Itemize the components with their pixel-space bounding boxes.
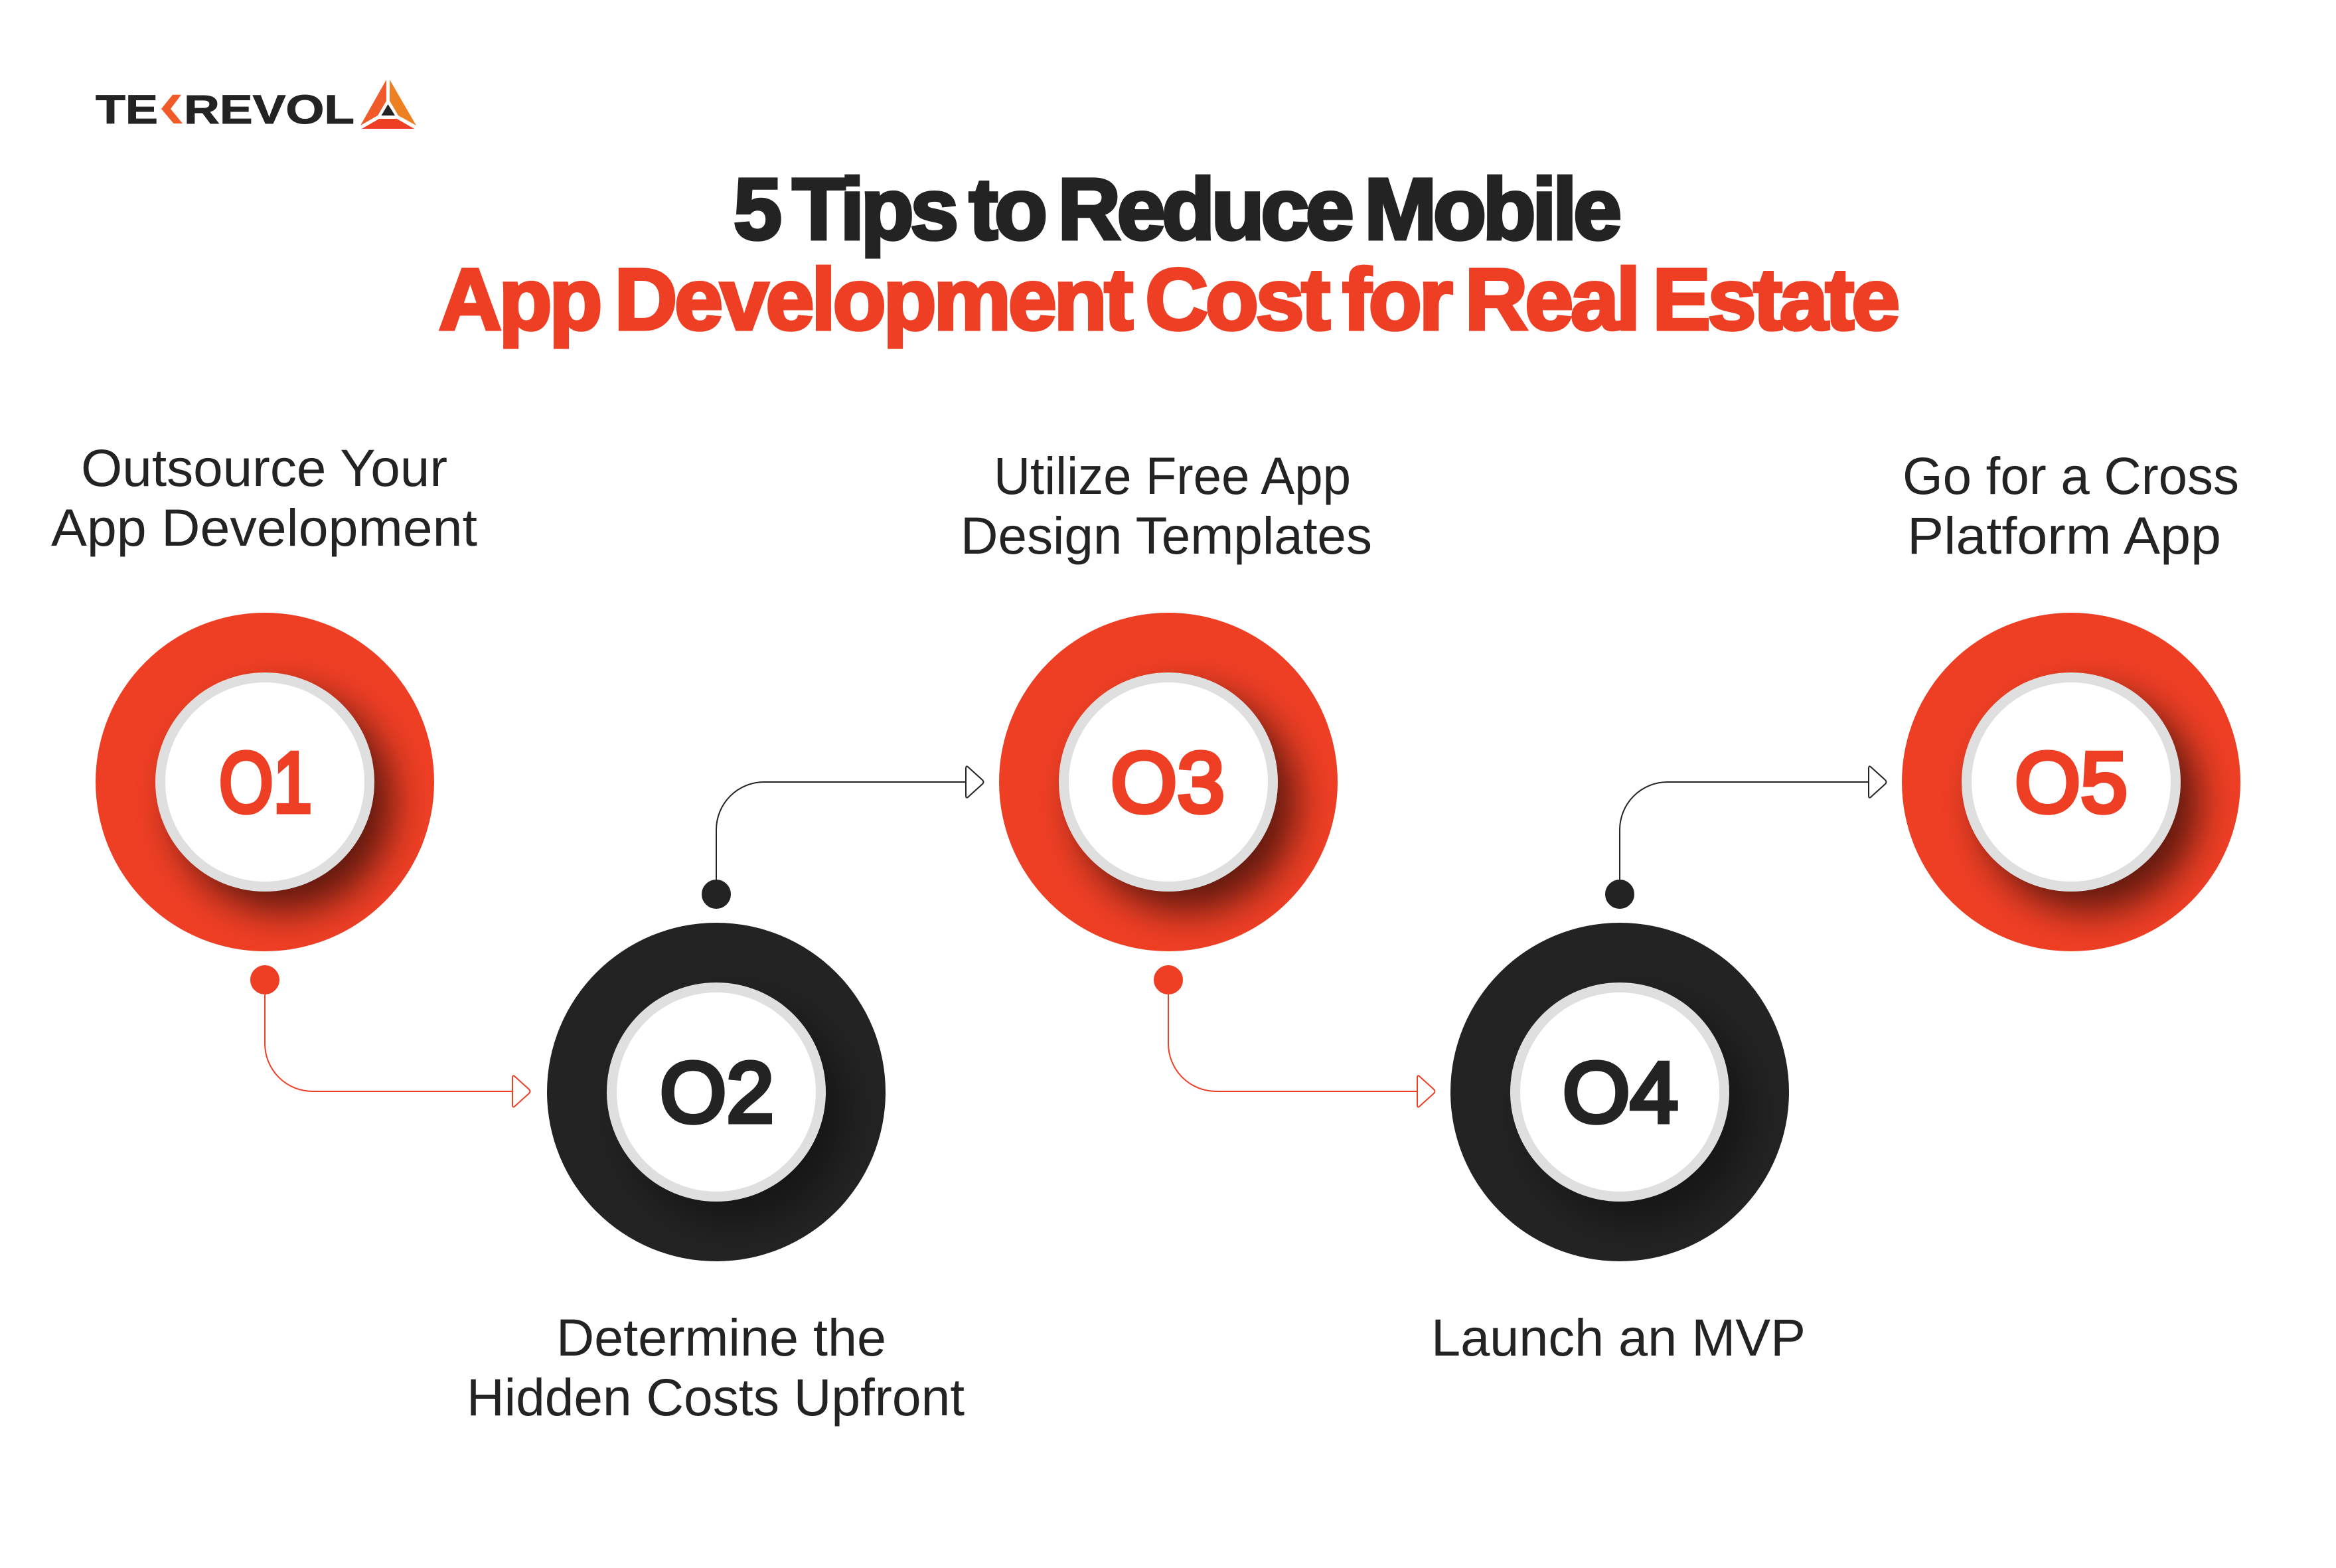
number 02: O2	[660, 1045, 774, 1140]
step 3 label	[961, 446, 1372, 565]
number 04: O4	[1563, 1045, 1678, 1140]
step 1 circle	[96, 613, 434, 951]
logo triangle mark	[360, 80, 416, 129]
logo: TekRevol	[96, 80, 416, 132]
step 5 circle	[1902, 613, 2240, 951]
number 03: O3	[1111, 735, 1225, 830]
logo wordmark	[96, 87, 354, 132]
title line 1: 5 Tips to Reduce Mobile	[734, 160, 1622, 258]
step 2 label	[467, 1308, 965, 1427]
logo wordmark: REVOL	[184, 87, 354, 132]
number 01: O1	[219, 735, 312, 830]
arrow: step 2 to step 3	[702, 766, 984, 908]
title	[439, 160, 1900, 348]
step 3 circle	[999, 613, 1338, 951]
step 3 label: Design Templates	[961, 506, 1372, 565]
step 3 label: Utilize Free App	[994, 446, 1351, 505]
arrow: step 4 to step 5	[1606, 766, 1887, 908]
step 2 label: Determine the	[556, 1308, 886, 1367]
step 5 label: Go for a Cross	[1903, 446, 2239, 505]
step 5 label	[1903, 446, 2239, 565]
step 1 label	[51, 438, 477, 557]
step 1 label: Outsource Your	[81, 438, 447, 497]
logo wordmark: TE	[96, 87, 158, 132]
number 05: O5	[2015, 735, 2128, 830]
arrow: step 1 to step 2	[251, 966, 530, 1107]
step 5 label: Platform App	[1907, 506, 2221, 565]
step 4 label: Launch an MVP	[1431, 1308, 1806, 1367]
step 2 label: Hidden Costs Upfront	[467, 1368, 965, 1427]
step 1 label: App Development	[51, 498, 477, 557]
arrow: step 3 to step 4	[1154, 966, 1435, 1107]
step 2 circle	[547, 923, 886, 1261]
step 4 circle	[1450, 923, 1789, 1261]
title line 2: App Development Cost for Real Estate	[439, 250, 1900, 348]
